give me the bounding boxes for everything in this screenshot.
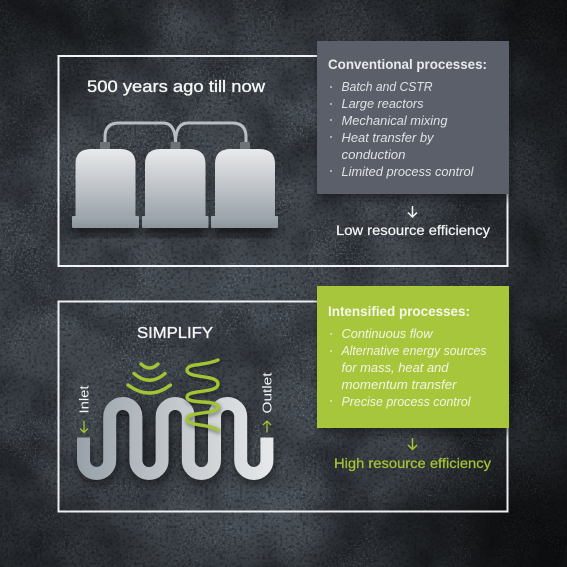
label: inlet: Inlet [76, 385, 92, 414]
list: conventional processes: Mechanical mixing [342, 113, 448, 128]
arrow: inlet [80, 421, 88, 432]
list: intensified processes: Precise process control [342, 394, 472, 409]
list: intensified processes: Alternative energy sources [341, 343, 487, 358]
list: intensified processes [330, 326, 487, 409]
panel: intensified frame [58, 302, 508, 512]
illustration: three connected reactors [72, 123, 278, 235]
label: outlet: Outlet [260, 372, 274, 414]
arrow: outlet [263, 421, 271, 432]
heading: simplify: SIMPLIFY [137, 325, 213, 342]
list: conventional processes: Limited process control [342, 164, 475, 179]
list: conventional processes [330, 79, 475, 179]
list: conventional processes: conduction [342, 147, 406, 162]
icon: energy waves [128, 364, 170, 393]
arrow: down to high efficiency [408, 438, 417, 450]
label: low resource efficiency: Low resource efficiency [336, 223, 490, 238]
tank shadows [74, 224, 276, 235]
panel: conventional frame [58, 56, 508, 266]
heading: intensified processes: Intensified processes: [328, 303, 470, 319]
panel: conventional processes [317, 41, 511, 200]
list: conventional processes: Batch and CSTR [342, 79, 432, 94]
reactor 3 [215, 149, 275, 216]
label: high resource efficiency: High resource efficiency [334, 456, 491, 471]
pipe caps [100, 142, 250, 149]
helix [187, 360, 218, 430]
list: conventional processes: Heat transfer by [342, 130, 435, 145]
list: intensified processes: Continuous flow [342, 326, 434, 341]
reactor 1 [76, 149, 136, 216]
heading: conventional processes: Conventional processes: [328, 56, 487, 72]
tube [84, 404, 267, 474]
list: intensified processes: momentum transfer [342, 377, 457, 392]
heading: 500 years ago till now: 500 years ago till now [87, 78, 265, 96]
tube shadow [84, 408, 268, 478]
helix shadow [188, 362, 219, 432]
panel: intensified processes [317, 286, 511, 434]
illustration: serpentine flow reactor [84, 404, 268, 478]
connecting pipes [105, 123, 246, 143]
icon: mixing helix [187, 360, 219, 432]
arrow: down to low efficiency [408, 206, 417, 217]
list: conventional processes: Large reactors [342, 96, 424, 111]
reactor 2 [145, 149, 206, 216]
list: intensified processes: for mass, heat and [342, 360, 449, 375]
